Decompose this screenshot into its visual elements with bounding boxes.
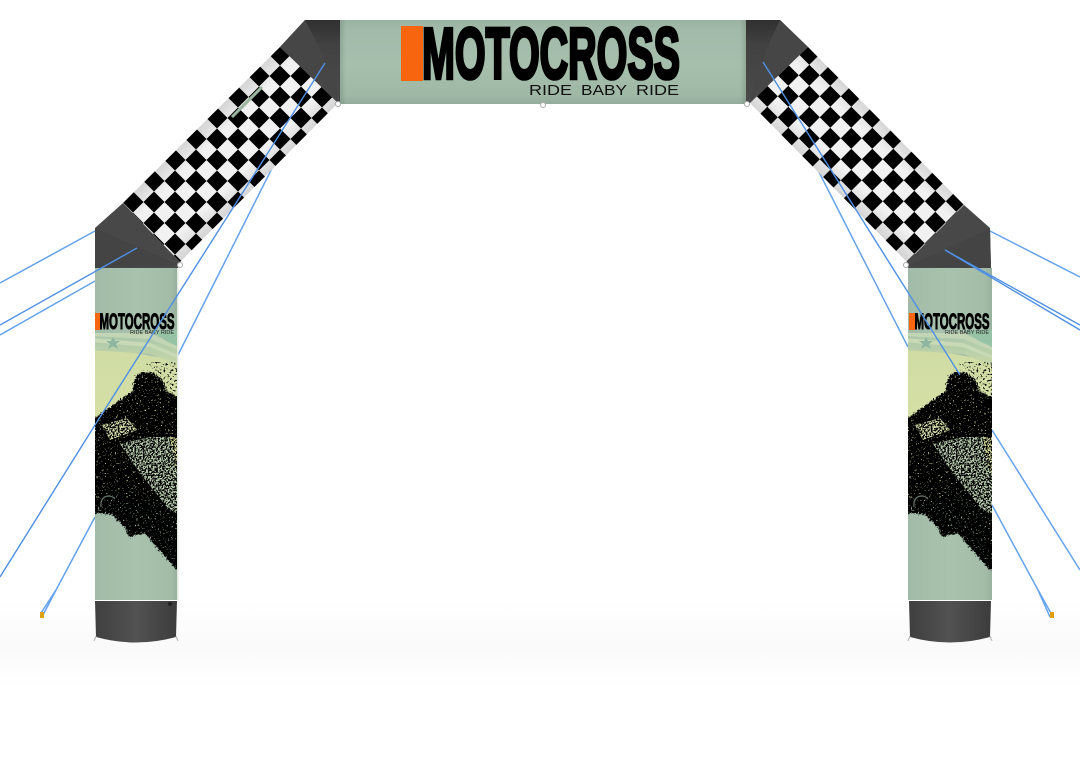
left column title: MOTOCROSS (100, 309, 174, 334)
right diagonal checkered tube (750, 47, 964, 262)
lower left dark corner (95, 203, 180, 268)
banner tagline: BABY (581, 83, 627, 99)
right column tagline: RIDE BABY RIDE (945, 330, 990, 336)
banner tagline: RIDE (636, 83, 679, 99)
right rider artwork (908, 330, 992, 571)
banner logo block (401, 26, 423, 81)
ground shadow (0, 600, 1080, 690)
left column logo block (95, 313, 100, 330)
right column logo block (909, 313, 915, 330)
lower right dark corner (907, 205, 991, 268)
top right dark corner (745, 20, 808, 104)
banner tagline (529, 83, 679, 99)
left column panel (95, 268, 178, 600)
left rider artwork (95, 330, 177, 570)
guy ropes behind the arch (0, 62, 1080, 617)
left column tagline: RIDE BABY RIDE (130, 330, 175, 336)
banner tagline: RIDE (529, 83, 572, 99)
top left dark corner (280, 20, 341, 104)
attachment rings (178, 102, 908, 268)
right column panel (908, 268, 992, 600)
banner title: MOTOCROSS (422, 15, 680, 95)
right column title: MOTOCROSS (914, 309, 990, 334)
left dark base (94, 601, 178, 642)
right dark base (908, 601, 992, 642)
top banner panel (340, 15, 746, 104)
left diagonal checkered tube (123, 47, 338, 262)
guy ropes in front of the arch (0, 62, 1080, 577)
ground anchors (40, 612, 1054, 618)
